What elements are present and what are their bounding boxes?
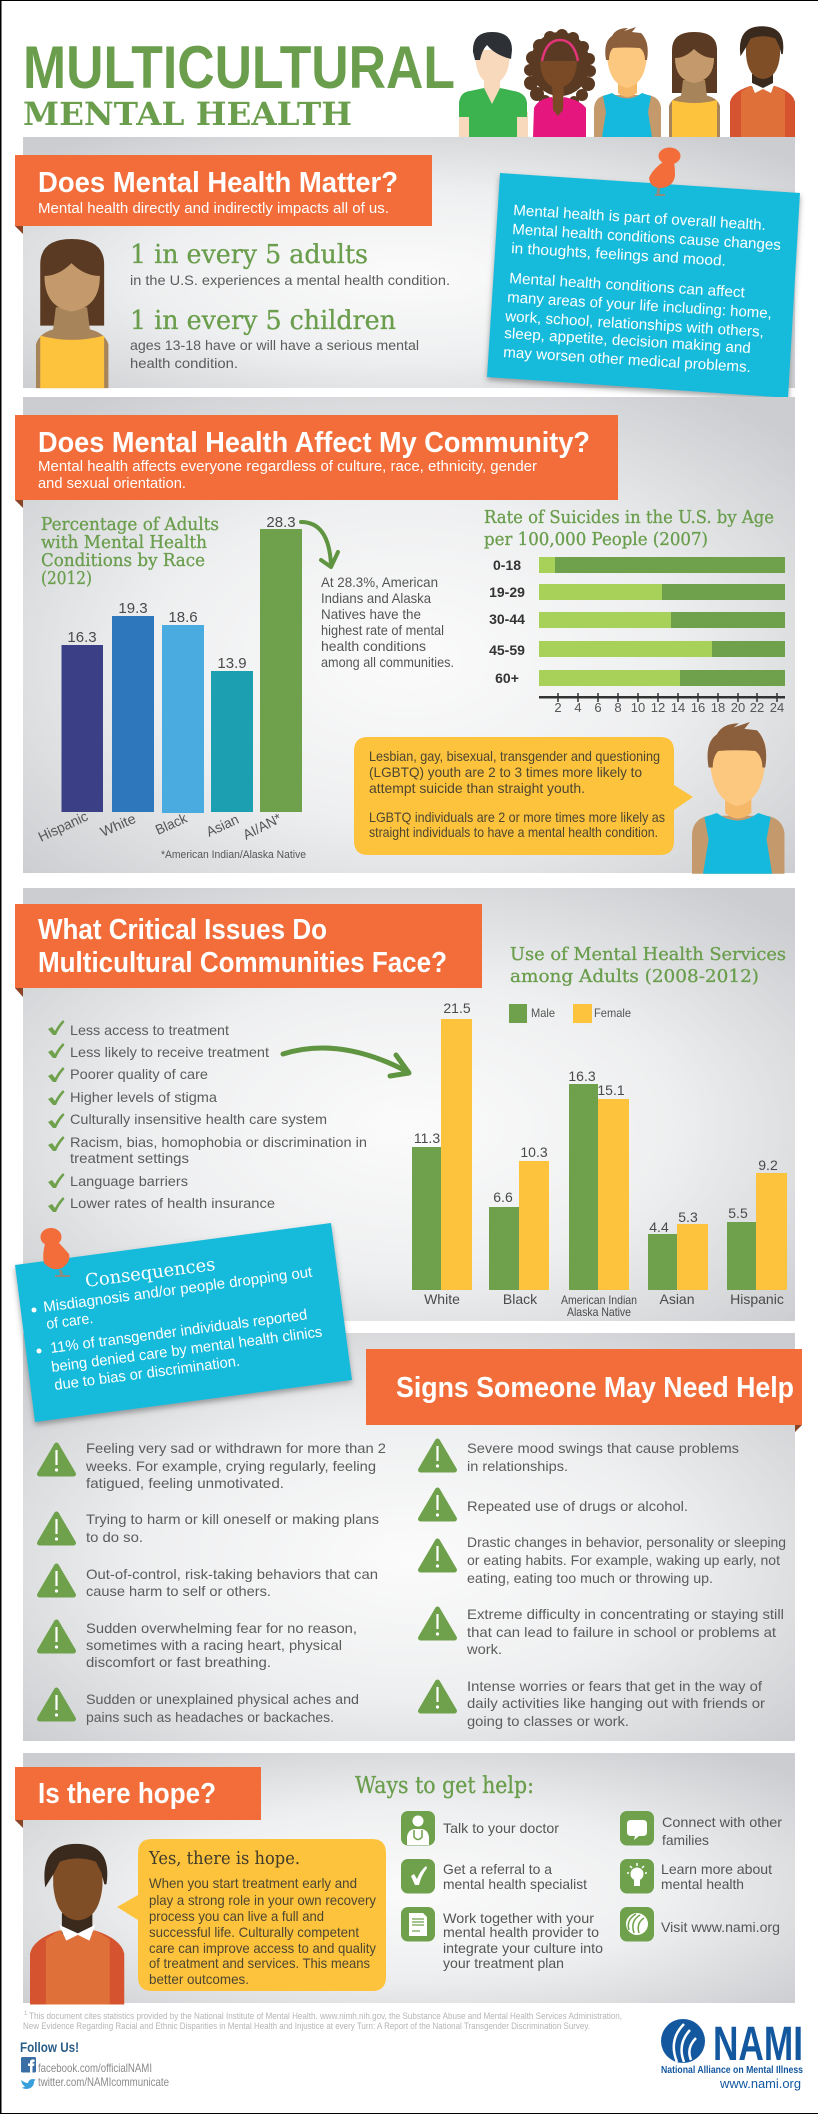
signs: left column: Trying to harm or kill oneself or making plans [86, 1511, 379, 1527]
bar chart: race [36, 514, 306, 861]
title [23, 34, 455, 133]
stat: adults: in the U.S. experiences a mental health condition. [130, 272, 450, 288]
bar chart: suicides by age: 45-59 [489, 642, 525, 658]
checklist: Language barriers [70, 1173, 188, 1189]
chart title: services: among Adults (2008-2012) [510, 966, 759, 987]
help item: website [620, 1907, 780, 1942]
bar chart: services: 21.5 [443, 1000, 471, 1016]
stat: children: ages 13-18 have or will have a serious mental [130, 337, 419, 353]
speech bubble: hope: care can improve access to and quality [149, 1940, 376, 1956]
help item: referral: mental health specialist [443, 1876, 587, 1892]
bar chart: suicides by age: 22 [750, 700, 764, 715]
title: MENTAL HEALTH [23, 95, 352, 133]
signs: left column: Sudden or unexplained physical aches and [86, 1691, 359, 1707]
bar chart: services: 5.5 [728, 1205, 748, 1221]
bar chart: race: 28.3 [266, 514, 296, 531]
signs: left column: Sudden overwhelming fear for no reason, [86, 1620, 357, 1636]
speech bubble: LGBTQ: attempt suicide than straight youth. [369, 780, 585, 796]
heading banner: Does Mental Health Affect My Community? [38, 427, 590, 459]
panel: hope [15, 1753, 795, 2004]
logo: NAMI [661, 2018, 803, 2091]
help item: families: families [662, 1832, 709, 1848]
bar chart: suicides by age [489, 557, 785, 715]
signs: left column: cause harm to self or others. [86, 1583, 271, 1599]
stat: children [130, 306, 419, 371]
checklist: Culturally insensitive health care system [70, 1111, 327, 1127]
signs: left column: weeks. For example, crying regularly, feeling [85, 1458, 376, 1474]
checklist: Racism, bias, homophobia or discrimination in [70, 1134, 367, 1150]
note: blue callout: Mental health conditions can affect [509, 270, 746, 301]
note: consequences [15, 1223, 352, 1422]
heading banner [15, 904, 482, 997]
signs: left column: Feeling very sad or withdrawn for more than 2 [86, 1440, 386, 1456]
note: blue callout: Mental health conditions cause changes [512, 221, 781, 254]
chart title: adults by race: (2012) [41, 568, 92, 589]
signs: right column: or eating habits. For example, waking up early, not [467, 1552, 780, 1568]
bar chart: race: 13.9 [217, 655, 247, 672]
heading banner: Signs Someone May Need Help [396, 1372, 794, 1404]
follow us: Follow Us! [20, 2039, 79, 2055]
help item: learn: Learn more about [661, 1861, 772, 1877]
bar chart: race: Asian [204, 811, 241, 840]
bar chart: services: Alaska Native [567, 1305, 631, 1319]
bar chart: race: *American Indian/Alaska Native [161, 849, 306, 861]
checklist: Less likely to receive treatment [70, 1044, 269, 1060]
callout text: AI/AN: health conditions [321, 638, 426, 654]
speech bubble: LGBTQ: (LGBTQ) youth are 2 to 3 times more likely to [369, 764, 642, 780]
note: consequences: 11% of transgender individuals reported [49, 1306, 308, 1357]
signs: left column [40, 1440, 386, 1725]
speech bubble: hope: better outcomes. [149, 1971, 249, 1987]
speech bubble: hope: play a strong role in your own recovery [149, 1892, 376, 1908]
help item: provider: Work together with your [443, 1910, 594, 1926]
bar chart: suicides by age: 24 [770, 700, 784, 715]
bar chart: suicides by age: 14 [671, 700, 685, 715]
chart title: adults by race: Conditions by Race [41, 550, 205, 571]
checklist: Lower rates of health insurance [70, 1195, 275, 1211]
note: blue callout: may worsen other medical problems. [503, 344, 751, 376]
legend [509, 1004, 631, 1023]
bar chart: suicides by age: 10 [631, 700, 645, 715]
panel: signs [23, 1333, 802, 1741]
chart title: suicides: per 100,000 People (2007) [484, 529, 708, 550]
stat: adults [130, 240, 450, 288]
person: pink shirt [524, 29, 596, 137]
speech bubble: hope: Yes, there is hope. [148, 1848, 300, 1869]
note: blue callout: sleep, appetite, decision making and [504, 325, 751, 357]
heading banner: Mental health directly and indirectly impacts all of us. [38, 200, 389, 217]
follow us: twitter.com/NAMIcommunicate [38, 2075, 169, 2089]
footnote [23, 2011, 622, 2031]
heading banner [366, 1349, 802, 1432]
chart title: suicides: Rate of Suicides in the U.S. by Age [484, 507, 774, 528]
note: consequences: Misdiagnosis and/or people dropping out [42, 1264, 314, 1316]
person: blue tank top [594, 27, 661, 137]
signs: right column: Repeated use of drugs or alcohol. [467, 1498, 688, 1514]
help item: provider: your treatment plan [443, 1955, 564, 1971]
note: consequences: being denied care by mental health clinics [50, 1323, 323, 1376]
help item: doctor: Talk to your doctor [443, 1820, 559, 1836]
heading banner: Mental health affects everyone regardless of culture, race, ethnicity, gender [38, 458, 537, 475]
bar chart: race: 18.6 [168, 609, 198, 626]
heading banner: Does Mental Health Matter? [38, 167, 398, 199]
bar chart: race: AI/AN* [240, 810, 284, 843]
icon: man [30, 1845, 124, 2004]
heading banner: Is there hope? [38, 1778, 216, 1810]
checklist [48, 1020, 367, 1212]
heading banner: Multicultural Communities Face? [38, 947, 447, 979]
bar chart: services: White [424, 1291, 460, 1307]
callout text: AI/AN [321, 574, 454, 670]
logo: NAMI: www.nami.org [719, 2076, 801, 2091]
note: blue callout: Mental health is part of overall health. [513, 202, 766, 234]
person: yellow shirt [669, 32, 720, 137]
help item: referral [401, 1859, 587, 1894]
signs: right column: work. [466, 1641, 502, 1657]
footnote: 1 [24, 2011, 28, 2017]
help item: doctor [401, 1811, 559, 1846]
panel: critical issues [15, 888, 795, 1321]
bar chart: services: 10.3 [520, 1144, 548, 1160]
help item: families [620, 1811, 782, 1848]
note: blue callout: many areas of your life including: home, [507, 289, 772, 322]
arrow: to chart [283, 1048, 409, 1076]
icon: push pin [649, 148, 680, 195]
speech bubble: LGBTQ [354, 737, 693, 855]
help item: provider [401, 1907, 603, 1971]
people illustration [459, 27, 795, 137]
signs: right column: in relationships. [467, 1458, 568, 1474]
bar chart: suicides by age: 8 [614, 700, 622, 715]
note: consequences: due to bias or discrimination. [53, 1353, 241, 1394]
bar chart: suicides by age: 4 [574, 700, 582, 715]
footnote: New Evidence Regarding Racial and Ethnic Disparities in Mental Health and Injustice at every Turn: A Report of the National Transgender Discrimination Survey. [23, 2021, 590, 2031]
callout text: AI/AN: Indians and Alaska [321, 590, 431, 606]
bar chart: services [412, 1000, 787, 1319]
footnote: This document cites statistics provided by the National Institute of Mental Health. www.nimh.nih.gov, the Substance Abuse and Mental Health Services Administration, [29, 2011, 622, 2021]
speech bubble: hope: process you can live a full and [149, 1908, 324, 1924]
signs: right column: daily activities like hanging out with friends or [467, 1695, 765, 1711]
signs: left column: sometimes with a racing heart, physical [86, 1637, 342, 1653]
signs: left column: Out-of-control, risk-taking behaviors that can [86, 1566, 378, 1582]
heading banner [15, 155, 432, 234]
heading: ways to get help: Ways to get help: [355, 1773, 534, 1799]
follow us: facebook.com/officialNAMI [38, 2061, 152, 2075]
speech bubble: hope: When you start treatment early and [149, 1875, 357, 1891]
title: MULTICULTURAL [23, 34, 455, 101]
speech bubble: hope [117, 1839, 386, 1991]
chart title: adults by race: with Mental Health [41, 532, 207, 553]
signs: right column: Intense worries or fears that get in the way of [467, 1678, 762, 1694]
heading banner: and sexual orientation. [38, 475, 186, 492]
bar chart: services: 15.1 [597, 1082, 625, 1098]
speech bubble: LGBTQ: Lesbian, gay, bisexual, transgender and questioning [369, 748, 660, 764]
heading banner [15, 1767, 261, 1828]
speech bubble: hope: successful life. Culturally competent [149, 1924, 359, 1940]
bar chart: services: 5.3 [678, 1209, 698, 1225]
icon: facebook [21, 2057, 36, 2072]
bar chart: suicides by age: 18 [711, 700, 725, 715]
chart title: suicides [484, 507, 774, 550]
panel: community [15, 397, 795, 874]
bar chart: race: White [98, 810, 138, 840]
signs: right column [420, 1440, 786, 1729]
help item: learn: mental health [661, 1876, 744, 1892]
legend: Male [531, 1006, 555, 1020]
panel: does mental health matter [15, 137, 800, 398]
signs: left column: pains such as headaches or backaches. [86, 1709, 334, 1725]
note: blue callout: in thoughts, feelings and mood. [511, 240, 726, 270]
bar chart: services: 6.6 [493, 1189, 513, 1205]
follow us [20, 2039, 169, 2089]
help item: referral: Get a referral to a [443, 1861, 552, 1877]
bar chart: race: 16.3 [67, 629, 97, 646]
stat: children: 1 in every 5 children [130, 306, 396, 336]
signs: left column: to do so. [86, 1529, 143, 1545]
note: consequences: Consequences [84, 1254, 217, 1292]
note: consequences: of care. [45, 1310, 94, 1333]
bar chart: suicides by age: 16 [691, 700, 705, 715]
bar chart: suicides by age: 12 [651, 700, 665, 715]
callout text: AI/AN: Natives have the [321, 606, 421, 622]
bar chart: services: 4.4 [649, 1219, 669, 1235]
signs: left column: discomfort or fast breathing. [86, 1654, 271, 1670]
help item: provider: mental health provider to [443, 1924, 599, 1940]
callout text: AI/AN: among all communities. [321, 654, 454, 670]
chart title: adults by race [41, 514, 219, 589]
bar chart: services: 16.3 [568, 1068, 596, 1084]
signs: left column: fatigued, feeling unmotivated. [86, 1475, 284, 1491]
signs: right column: that can lead to failure in school or problems at [467, 1624, 776, 1640]
icon: woman [36, 239, 108, 388]
signs: right column: going to classes or work. [467, 1713, 629, 1729]
stat: children: health condition. [130, 355, 238, 371]
signs: right column: eating, eating too much or throwing up. [467, 1570, 713, 1586]
checklist: treatment settings [70, 1150, 189, 1166]
bar chart: suicides by age: 6 [594, 700, 602, 715]
bar chart: suicides by age: 0-18 [493, 557, 521, 573]
bar chart: race: 19.3 [118, 600, 148, 617]
bar chart: services: 11.3 [414, 1130, 440, 1146]
chart title: services: Use of Mental Health Services [510, 944, 786, 965]
bar chart: suicides by age: 60+ [495, 670, 519, 686]
signs: right column: Extreme difficulty in concentrating or staying still [467, 1606, 784, 1622]
bar chart: suicides by age: 2 [554, 700, 562, 715]
help item: families: Connect with other [662, 1814, 782, 1830]
signs: right column: Drastic changes in behavior, personality or sleeping [467, 1534, 786, 1550]
bar chart: race: Hispanic [36, 808, 90, 845]
stat: adults: 1 in every 5 adults [130, 240, 368, 270]
bar chart: services: Hispanic [730, 1291, 784, 1307]
help item: website: Visit www.nami.org [661, 1919, 780, 1935]
note: blue callout: work, school, relationships with others, [504, 308, 764, 341]
bar chart: services: Black [503, 1291, 538, 1307]
heading banner [15, 415, 618, 508]
person: green shirt [459, 32, 528, 137]
help item: learn [620, 1859, 772, 1894]
checklist: Poorer quality of care [70, 1066, 208, 1082]
legend: Female [594, 1006, 631, 1020]
help item: provider: integrate your culture into [443, 1940, 603, 1956]
bar chart: suicides by age: 30-44 [489, 611, 525, 627]
speech bubble: LGBTQ: straight individuals to have a mental health condition. [369, 824, 658, 840]
checklist: Higher levels of stigma [70, 1089, 217, 1105]
speech bubble: hope: of treatment and services. This means [149, 1955, 370, 1971]
speech bubble: LGBTQ: LGBTQ individuals are 2 or more times more likely as [369, 809, 665, 825]
bar chart: services: 9.2 [758, 1157, 778, 1173]
bar chart: services: Asian [659, 1291, 695, 1307]
checklist: Less access to treatment [70, 1022, 229, 1038]
callout text: AI/AN: At 28.3%, American [321, 574, 438, 590]
signs: right column: Severe mood swings that cause problems [467, 1440, 739, 1456]
icon: boy [692, 722, 784, 874]
callout text: AI/AN: highest rate of mental [321, 622, 444, 638]
chart title: adults by race: Percentage of Adults [41, 514, 219, 535]
bar chart: services: American Indian [561, 1293, 637, 1307]
arrow: curved down [301, 522, 338, 567]
person: orange sweater [730, 27, 795, 137]
logo mark [661, 2019, 705, 2063]
bar chart: race: Black [153, 809, 190, 838]
bar chart: suicides by age: 20 [731, 700, 745, 715]
heading banner: What Critical Issues Do [38, 914, 327, 946]
icon: push pin [40, 1228, 70, 1276]
bar chart: suicides by age: 19-29 [489, 584, 525, 600]
note: blue callout [487, 173, 800, 398]
chart title: services [510, 944, 786, 987]
icon: twitter [21, 2079, 36, 2089]
